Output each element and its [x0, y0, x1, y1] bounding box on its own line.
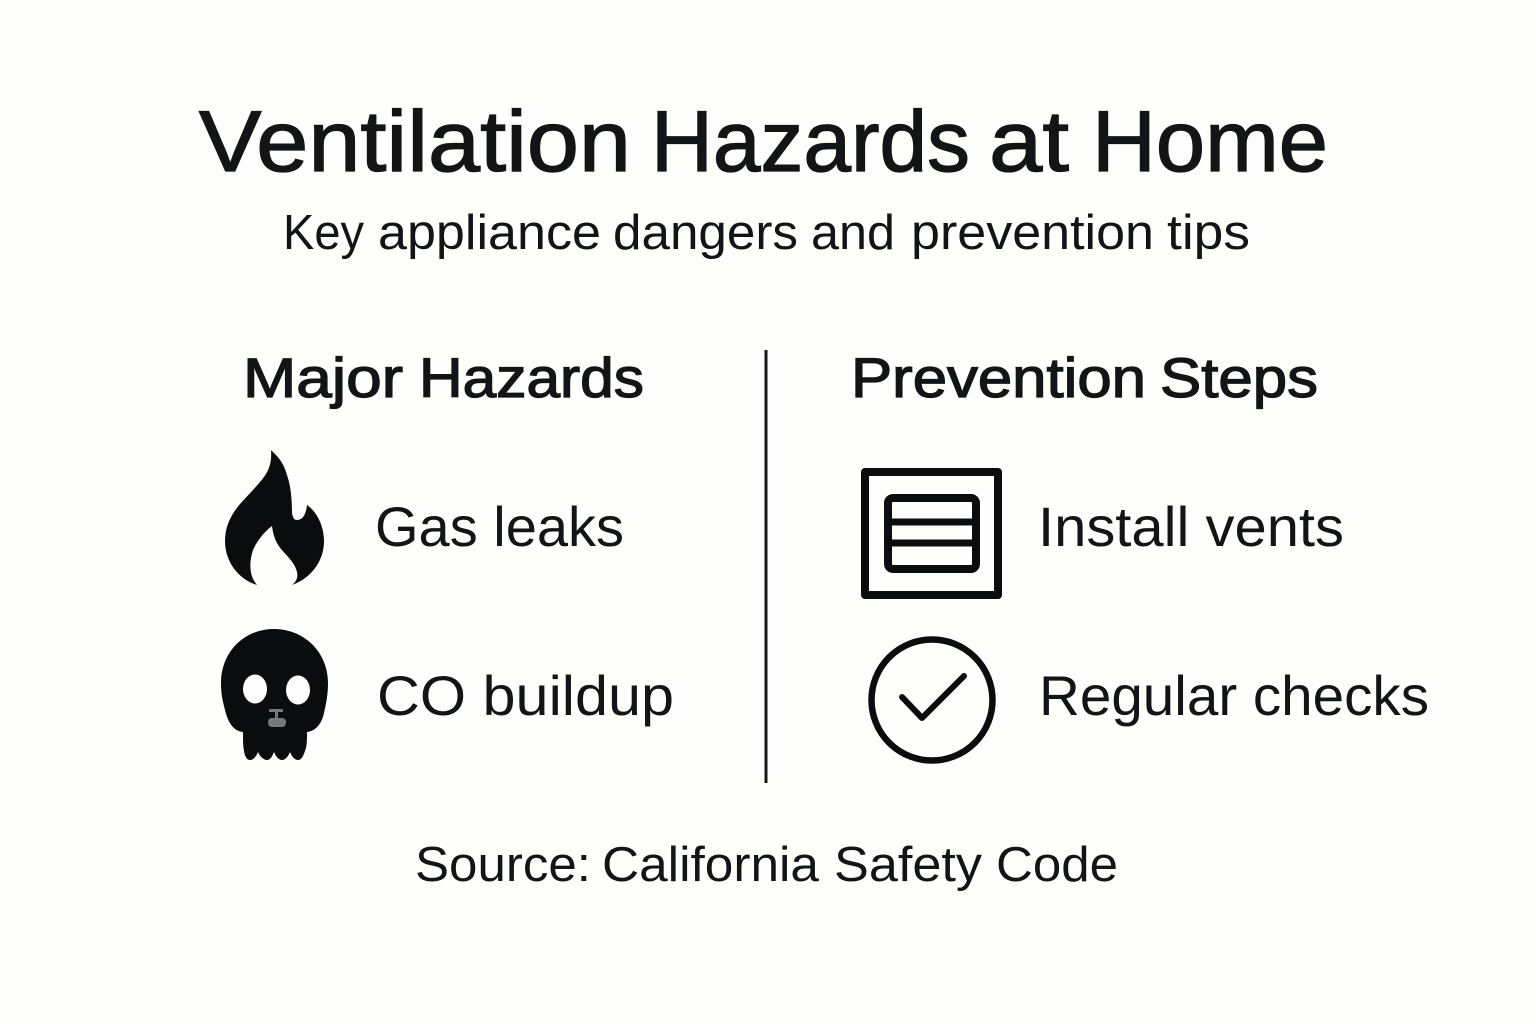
icon: check circle [872, 640, 992, 760]
icon: skull [221, 629, 328, 760]
subtitle: and [811, 206, 895, 260]
heading: prevention steps [851, 346, 1318, 409]
icon: flame [225, 450, 324, 585]
heading: major hazards [243, 346, 644, 409]
panel: major hazards [221, 346, 674, 760]
label: install vents: Install vents [1038, 495, 1344, 558]
heading: prevention steps: Steps [1160, 346, 1318, 409]
subtitle: dangers [613, 206, 798, 260]
heading: major hazards: Major [243, 346, 403, 409]
source note: Safety [834, 838, 983, 892]
heading: major hazards: Hazards [419, 346, 644, 409]
title: Ventilation [199, 94, 631, 190]
icon: vent [865, 472, 998, 595]
heading: prevention steps: Prevention [851, 346, 1146, 409]
title: at [989, 94, 1069, 190]
source note: California [602, 838, 820, 892]
source note [415, 838, 1118, 892]
label: regular checks: Regular checks [1039, 664, 1429, 727]
label: gas leaks: Gas leaks [375, 495, 624, 558]
subtitle: Key [283, 206, 364, 260]
divider [764, 350, 768, 783]
source note: Source: [415, 838, 591, 892]
subtitle: appliance [378, 206, 601, 260]
title: Home [1092, 94, 1328, 190]
title: Hazards [651, 94, 970, 190]
source note: Code [996, 838, 1118, 892]
subtitle: tips [1167, 206, 1250, 260]
label: co buildup: CO buildup [377, 664, 674, 727]
subtitle [283, 206, 1250, 260]
title [199, 94, 1328, 190]
subtitle: prevention [911, 206, 1154, 260]
panel: prevention steps [851, 346, 1429, 760]
